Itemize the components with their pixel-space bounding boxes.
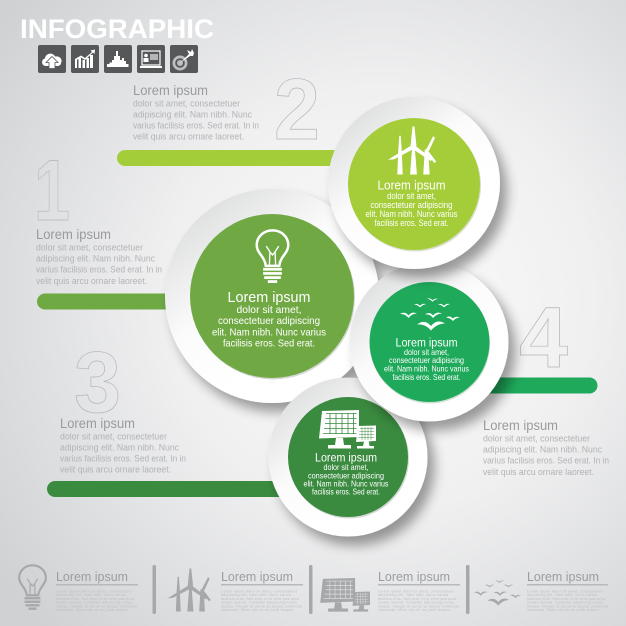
circle 1 text: consectetuer adipiscing	[218, 315, 320, 327]
panel: circle 4 birds	[350, 262, 508, 422]
footer icon: lightbulb	[19, 565, 46, 610]
footer item 3: adipiscing elit. Nam nibh. Nunc varius	[378, 593, 448, 597]
text block: step 1: velit quis arcu ornare laoreet.	[36, 275, 147, 286]
circle 1 text: Lorem ipsum	[228, 290, 310, 306]
number 4: 4	[519, 290, 568, 386]
text block: step 4: adipiscing elit. Nam nibh. Nunc	[483, 444, 602, 454]
circle 4 text: facilisis eros. Sed erat.	[392, 373, 460, 382]
circle 2 text: elit. Nam nibh. Nunc varius	[366, 209, 458, 219]
footer item 3: massa. Integer ut purus ac augue commodo	[378, 604, 459, 608]
circle 4 text: consectetuer adipiscing	[389, 356, 464, 365]
title: INFOGRAPHIC	[20, 14, 214, 44]
circle 4 text: Lorem ipsum	[396, 338, 458, 350]
circle 1 text: facilisis eros. Sed erat.	[223, 338, 315, 350]
panel: circle 3 solar panels	[268, 378, 428, 536]
text block: step 2: adipiscing elit. Nam nibh. Nunc	[133, 108, 252, 120]
text block: step 4: Lorem ipsum	[483, 418, 558, 433]
icon row	[38, 45, 198, 73]
text block: step 3: Lorem ipsum	[60, 416, 135, 431]
circle 1 text: elit. Nam nibh. Nunc varius	[212, 326, 326, 338]
text block: step 1: dolor sit amet, consectetuer	[36, 242, 143, 252]
text block: step 3: dolor sit amet, consectetuer	[60, 430, 167, 442]
bar: step 4	[470, 378, 598, 394]
number 1: 1	[34, 143, 70, 239]
text block: step 3: adipiscing elit. Nam nibh. Nunc	[60, 442, 179, 452]
icon: wind turbines	[388, 126, 436, 175]
text block: step 4: velit quis arcu ornare laoreet.	[483, 466, 594, 477]
circle 2 text: Lorem ipsum	[378, 178, 446, 192]
footer item 4: Lorem ipsum	[527, 570, 599, 584]
footer item 2: commodo. Nunc nec mi eu justo tempor	[221, 608, 294, 612]
panel: circle 2 wind turbines	[328, 97, 500, 269]
footer item 1: adipiscing elit. Nam nibh. Nunc varius	[56, 593, 126, 597]
number 2: 2	[274, 62, 320, 158]
bar: step 1	[37, 294, 187, 310]
footer icon: wind turbines	[168, 568, 211, 612]
circle 4 text: elit. Nam nibh. Nunc varius	[384, 364, 469, 374]
text block: step 2: varius facilisis eros. Sed erat. In in	[133, 120, 259, 130]
circle 2 text: dolor sit amet,	[387, 191, 436, 201]
footer item 3: Lorem ipsum dolor sit amet, consectetuer	[378, 590, 455, 594]
footer item 3	[378, 570, 460, 612]
text block: step 2: Lorem ipsum	[133, 83, 208, 98]
footer item 4	[527, 570, 608, 612]
circle 3 text	[304, 452, 388, 496]
number 3: 3	[74, 335, 121, 431]
icon: solar panels	[319, 410, 376, 448]
icon: bar graph	[104, 45, 132, 73]
footer item 4: ornare laoreet. Curabitur adipiscing luctus	[527, 601, 603, 605]
footer item 2: adipiscing elit. Nam nibh. Nunc varius	[221, 593, 291, 597]
bar: step 3	[47, 481, 297, 497]
footer item 2: massa. Integer ut purus ac augue commodo	[221, 604, 302, 608]
circle 1 text	[212, 290, 326, 350]
icon: lightbulb	[257, 230, 288, 283]
footer item 4: commodo. Nunc nec mi eu justo tempor	[527, 608, 600, 612]
icon: rising chart	[71, 45, 99, 73]
footer item 4: adipiscing elit. Nam nibh. Nunc varius	[527, 593, 597, 597]
circle 1 text: dolor sit amet,	[236, 304, 302, 316]
text block: step 3	[60, 416, 186, 474]
circle 4 text	[384, 338, 469, 382]
footer item 4: massa. Integer ut purus ac augue commodo	[527, 604, 608, 608]
circle 4 text: dolor sit amet,	[404, 348, 449, 357]
text block: step 3: varius facilisis eros. Sed erat. In in	[60, 452, 186, 464]
footer item 1: Lorem ipsum dolor sit amet, consectetuer	[56, 590, 133, 594]
circle 3 text: consectetuer adipiscing	[308, 472, 384, 480]
circle 2 text	[366, 178, 458, 228]
text block: step 1: adipiscing elit. Nam nibh. Nunc	[36, 252, 155, 264]
footer item 2: Lorem ipsum	[221, 570, 293, 584]
text block: step 1	[36, 227, 162, 286]
circle 3 text: dolor sit amet,	[324, 463, 368, 472]
footer item 2	[221, 570, 303, 612]
circle 2 text: consectetuer adipiscing	[370, 200, 453, 210]
footer item 3: commodo. Nunc nec mi eu justo tempor	[378, 608, 451, 612]
footer item 3: ornare laoreet. Curabitur adipiscing luctus	[378, 601, 454, 605]
footer item 4: Lorem ipsum dolor sit amet, consectetuer	[527, 590, 604, 594]
footer item 1	[56, 570, 138, 612]
icon: target and arrow	[170, 45, 198, 73]
panel: circle 1 lightbulb	[165, 189, 379, 403]
circle 3 text: elit. Nam nibh. Nunc varius	[304, 480, 388, 488]
text block: step 3: velit quis arcu ornare laoreet.	[60, 464, 171, 474]
footer item 2: facilisis eros. Sed erat. In in velit quis arcu	[221, 597, 299, 601]
footer item 3: Lorem ipsum	[378, 570, 450, 584]
icon: laptop profile	[137, 45, 165, 73]
circle 2 text: facilisis eros. Sed erat.	[374, 218, 448, 228]
footer item 1: massa. Integer ut purus ac augue commodo	[56, 604, 137, 608]
footer item 1: Lorem ipsum	[56, 570, 128, 584]
text block: step 4: dolor sit amet, consectetuer	[483, 432, 590, 444]
icon: cloud upload	[38, 45, 66, 73]
bar: step 2	[117, 150, 352, 166]
circle 3 text: Lorem ipsum	[315, 452, 377, 464]
text block: step 1: varius facilisis eros. Sed erat. In in	[36, 264, 162, 274]
icon: birds	[400, 298, 460, 330]
footer item 1: ornare laoreet. Curabitur adipiscing luctus	[56, 601, 132, 605]
text block: step 2: dolor sit amet, consectetuer	[133, 98, 240, 108]
footer item 1: facilisis eros. Sed erat. In in velit quis arcu	[56, 597, 134, 601]
circle 3 text: facilisis eros. Sed erat.	[312, 488, 380, 496]
text block: step 4	[483, 418, 609, 477]
footer item 3: facilisis eros. Sed erat. In in velit quis arcu	[378, 597, 456, 601]
footer icon: solar panels	[320, 578, 370, 612]
footer strip	[19, 565, 608, 614]
text block: step 2	[133, 83, 259, 142]
footer item 2: Lorem ipsum dolor sit amet, consectetuer	[221, 590, 298, 594]
text block: step 2: velit quis arcu ornare laoreet.	[133, 130, 244, 142]
footer item 1: commodo. Nunc nec mi eu justo tempor	[56, 608, 129, 612]
text block: step 1: Lorem ipsum	[36, 227, 111, 242]
text block: step 4: varius facilisis eros. Sed erat. In in	[483, 454, 609, 466]
footer icon: birds	[474, 580, 521, 606]
footer item 2: ornare laoreet. Curabitur adipiscing luctus	[221, 601, 297, 605]
footer item 4: facilisis eros. Sed erat. In in velit quis arcu	[527, 597, 605, 601]
